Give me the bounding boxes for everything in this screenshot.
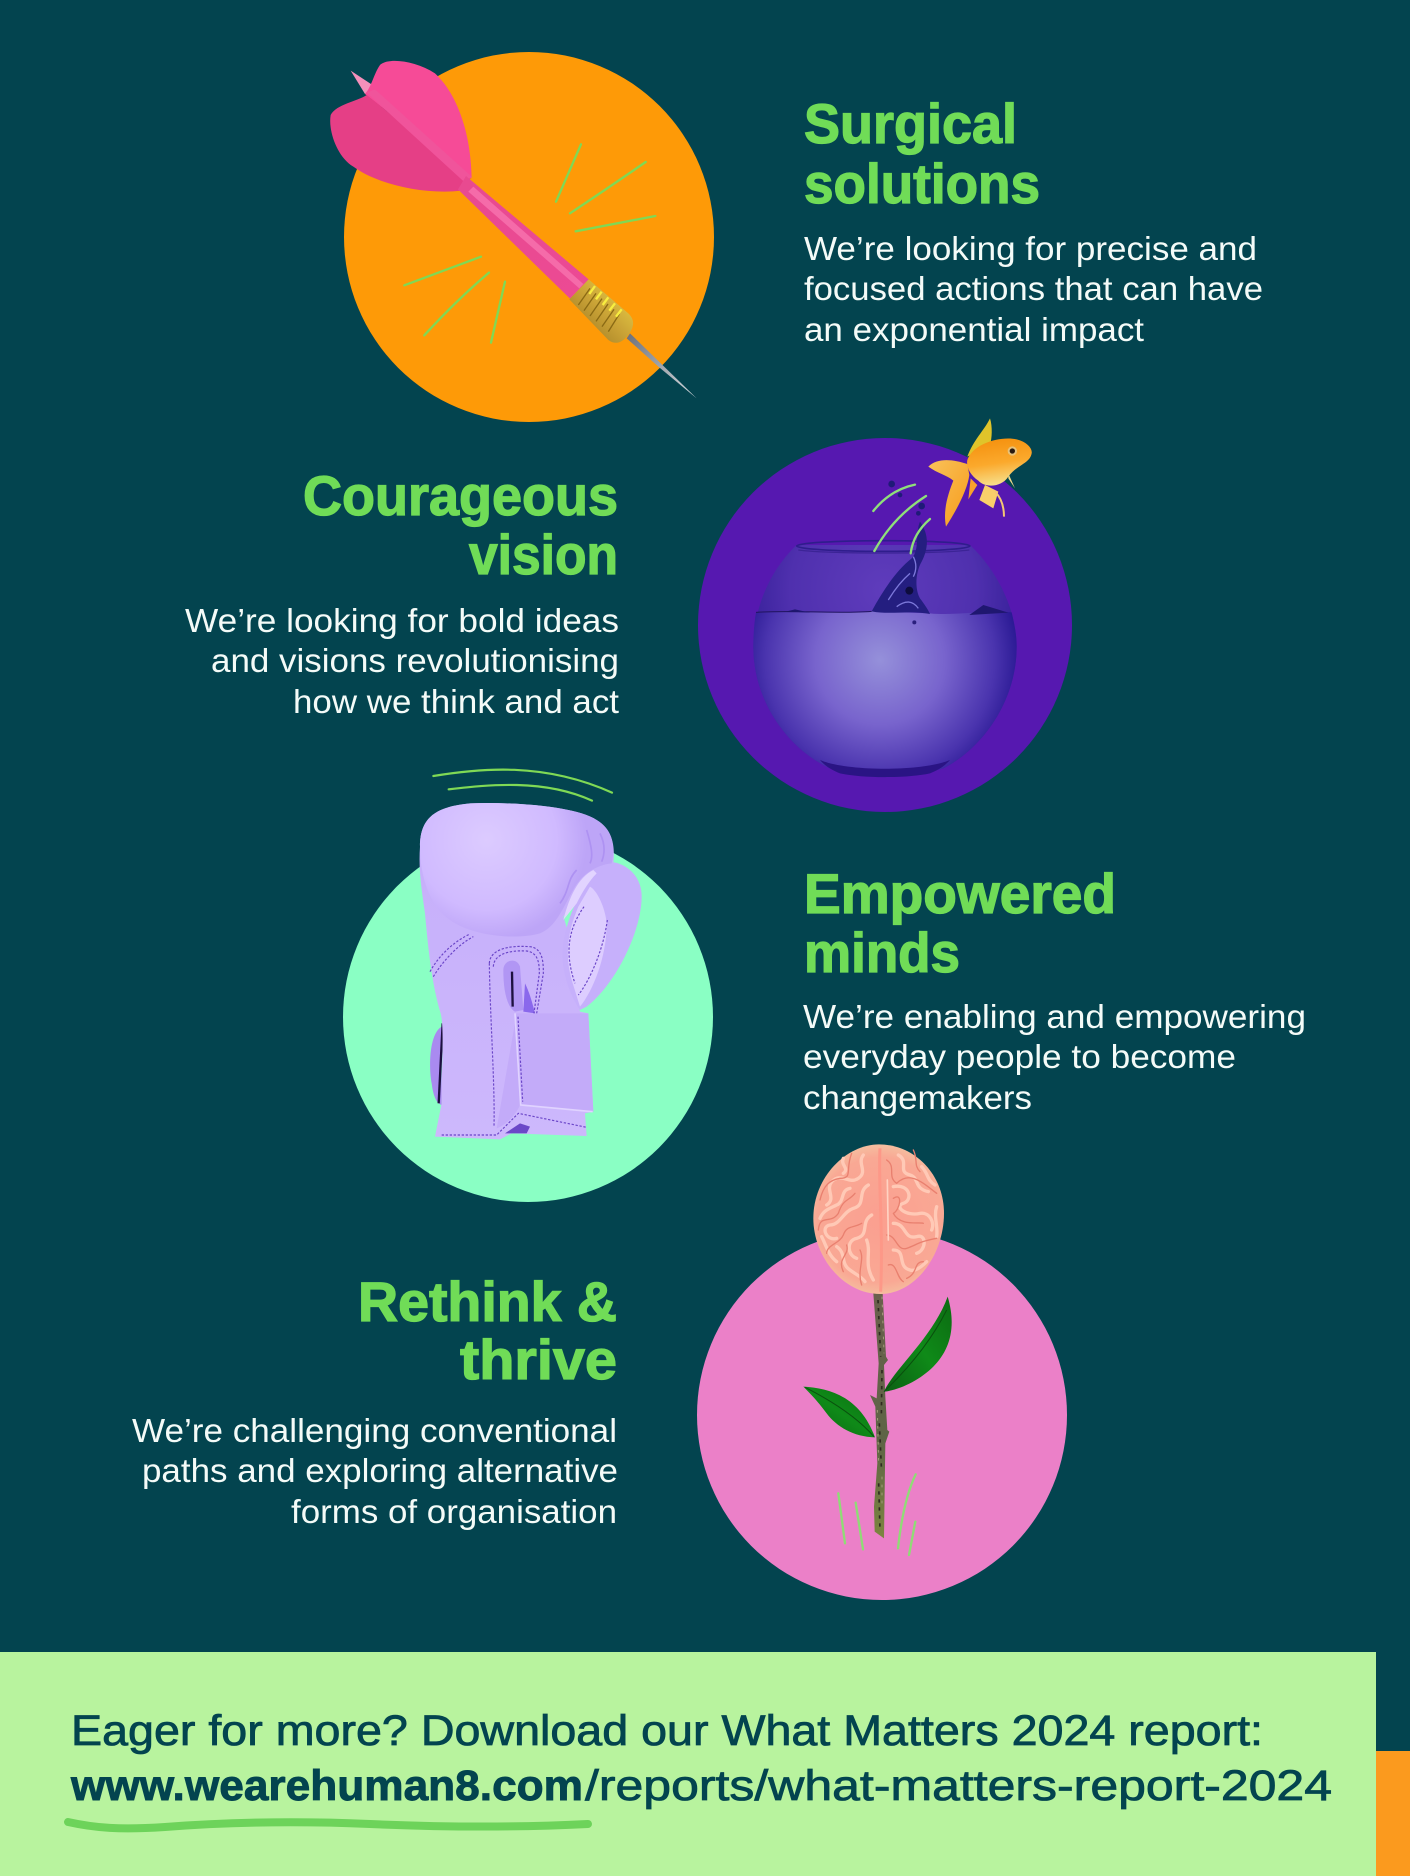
heading: Empowered [804, 862, 1116, 925]
icon: dart [330, 61, 697, 398]
report url: www.wearehuman8.com [70, 1762, 583, 1810]
body text: an exponential impact [804, 312, 1145, 349]
body text: forms of organisation [291, 1494, 617, 1531]
heading: vision [469, 523, 618, 586]
body text [804, 231, 1263, 349]
body text [185, 603, 620, 721]
pink circle [697, 1230, 1067, 1600]
icon: boxing glove [420, 803, 642, 1139]
motion arcs [873, 485, 930, 553]
orange circle [344, 52, 714, 422]
download prompt: Eager for more? Download our What Matters 2024 report: [71, 1707, 1263, 1755]
motion lines [838, 1474, 916, 1555]
panel: surgical solutions [330, 52, 1263, 422]
report url: /reports/what-matters-report-2024 [585, 1762, 1332, 1810]
mint circle [343, 832, 713, 1202]
body text: changemakers [803, 1080, 1032, 1117]
body text: paths and exploring alternative [142, 1453, 618, 1490]
hand-drawn underline [68, 1822, 588, 1828]
heading: Courageous [303, 464, 618, 527]
panel: empowered minds [343, 770, 1306, 1202]
icon: brain flower [803, 1144, 952, 1538]
body text: everyday people to become [803, 1039, 1236, 1076]
body text: We’re enabling and empowering [803, 999, 1306, 1036]
heading: solutions [804, 152, 1040, 215]
motion arcs [433, 770, 612, 801]
icon: fishbowl [753, 481, 1017, 777]
body text: We’re looking for bold ideas [185, 603, 619, 640]
body text: We’re challenging conventional [132, 1413, 617, 1450]
report url [70, 1762, 1332, 1810]
water splash [872, 522, 930, 614]
banner background [0, 1652, 1376, 1876]
heading [804, 92, 1040, 215]
purple circle [698, 438, 1072, 812]
body text: how we think and act [293, 684, 620, 721]
panel: rethink and thrive [132, 1144, 1067, 1600]
heading: Surgical [804, 92, 1017, 155]
heading [358, 1270, 617, 1391]
heading [804, 862, 1116, 984]
panel: courageous vision [185, 418, 1072, 812]
body text: focused actions that can have [804, 271, 1263, 308]
body text [803, 999, 1306, 1117]
body text: and visions revolutionising [211, 643, 619, 680]
heading: thrive [460, 1328, 617, 1391]
heading [303, 464, 618, 586]
body text [132, 1413, 618, 1531]
body text: We’re looking for precise and [804, 231, 1257, 268]
orange corner strip [1376, 1751, 1410, 1876]
panel: download banner [0, 1652, 1376, 1876]
motion lines [404, 144, 655, 343]
heading: Rethink & [358, 1270, 617, 1333]
icon: goldfish [928, 418, 1032, 527]
heading: minds [804, 921, 960, 984]
